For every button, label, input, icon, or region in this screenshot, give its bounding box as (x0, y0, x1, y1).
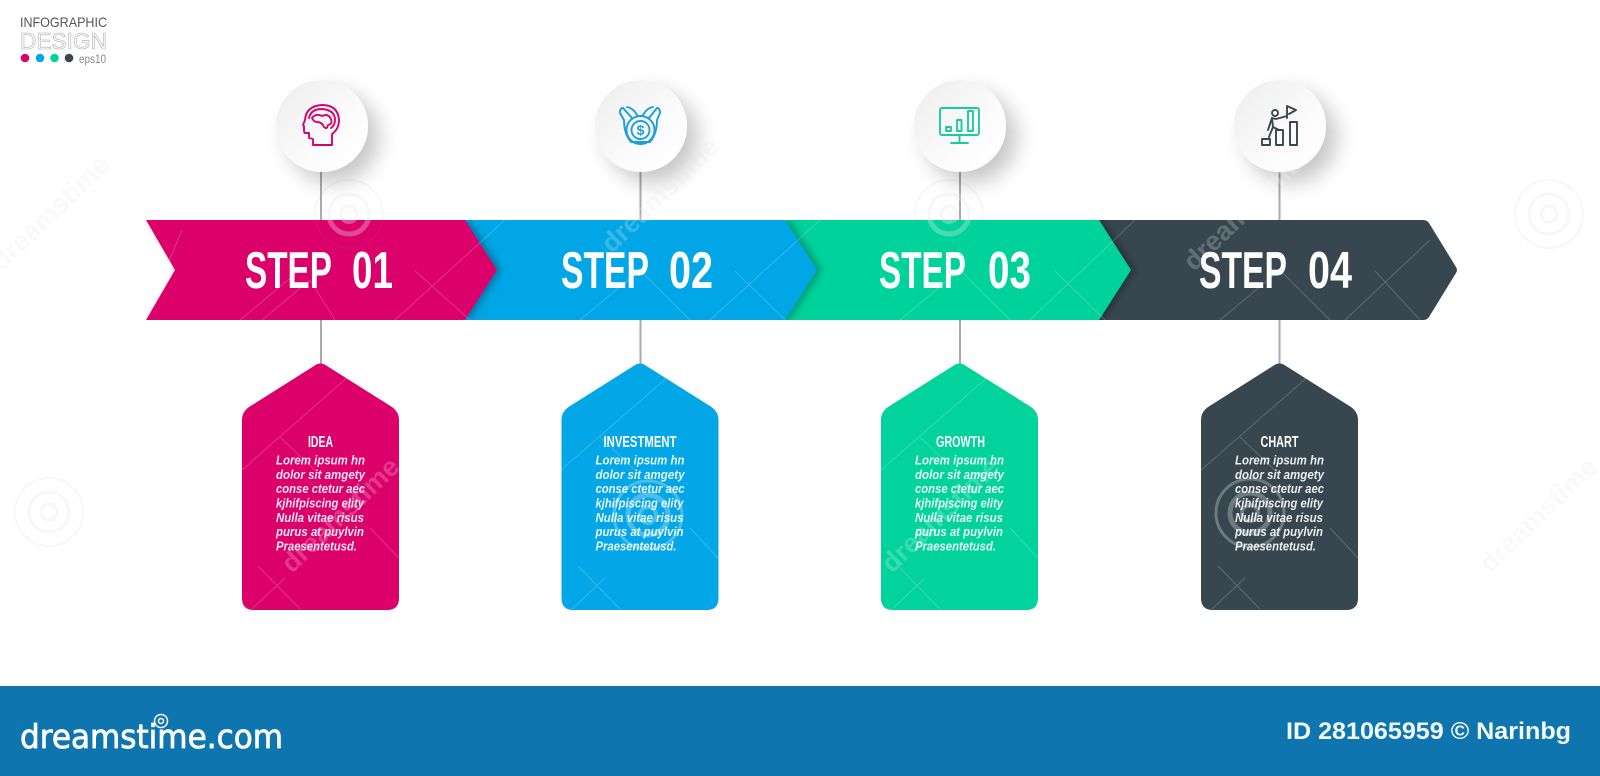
card body text: idea (275, 454, 366, 554)
card title: idea: IDEA (308, 434, 333, 451)
card title: investment: INVESTMENT (604, 434, 677, 451)
card body text: investment: kjhifpiscing elity (596, 496, 684, 510)
card body text: growth: kjhifpiscing elity (915, 496, 1004, 510)
card body text: investment: dolor sit amgety (596, 468, 685, 482)
label: step 04: STEP (1199, 242, 1287, 300)
label: step 04: 04 (1308, 242, 1352, 300)
card title: chart: CHART (1260, 434, 1299, 451)
card body text: chart: Lorem ipsum hn (1235, 454, 1324, 468)
arrow: step 01 (146, 220, 497, 320)
card body text: growth: Lorem ipsum hn (915, 454, 1004, 468)
footer brand: dreamstime.com (20, 717, 283, 756)
card body text: chart: kjhifpiscing elity (1235, 496, 1324, 510)
card body text: chart: purus at puylvin (1234, 525, 1323, 539)
logo colour dots (21, 54, 73, 62)
card body text: idea: purus at puylvin (275, 525, 364, 539)
card body text: idea: Lorem ipsum hn (276, 454, 365, 468)
watermark overlay: dreamstime (875, 451, 1005, 578)
icon: person climbing bars to flag (1262, 106, 1297, 145)
circle badge: investment (595, 80, 687, 172)
card: investment (562, 364, 718, 610)
arrow band (146, 220, 1457, 320)
step labels (245, 242, 1352, 300)
card body text: growth (914, 454, 1005, 554)
label: step 03: 03 (988, 242, 1031, 300)
card body text: chart: dolor sit amgety (1235, 468, 1325, 482)
card body text: investment: Praesentetusd. (596, 540, 676, 554)
arrow: step 04 (1090, 220, 1457, 320)
card body text: investment (595, 454, 685, 554)
arrow: step 02 (460, 220, 817, 320)
card body text: investment: conse ctetur aec (596, 482, 685, 496)
watermark overlay: dreamstime (1473, 451, 1600, 578)
card body text: growth: conse ctetur aec (915, 482, 1004, 496)
card body text: chart: conse ctetur aec (1235, 482, 1324, 496)
card body text: investment: Nulla vitae risus (596, 511, 684, 525)
card: growth (881, 364, 1038, 610)
logo: infographic design (20, 14, 107, 66)
brand spiral (154, 714, 168, 728)
card: chart (1201, 364, 1358, 610)
card body text: growth: Praesentetusd. (915, 540, 996, 554)
connector lines (321, 170, 1280, 365)
icon: head with brain (303, 105, 339, 145)
logo eps label: eps10 (79, 54, 106, 66)
card body text: investment: purus at puylvin (595, 525, 684, 539)
watermark overlay (0, 131, 1600, 609)
label: step 02: 02 (669, 242, 713, 300)
card title: growth: GROWTH (936, 434, 985, 451)
arrow: step 03 (780, 220, 1131, 320)
label: step 01: 01 (352, 242, 393, 300)
logo subheading: DESIGN (20, 28, 107, 54)
label: step 02: STEP (561, 242, 649, 300)
card: idea (242, 364, 399, 610)
card body text: chart (1234, 454, 1325, 554)
logo heading: INFOGRAPHIC (20, 14, 107, 30)
card body text: growth: dolor sit amgety (915, 468, 1005, 482)
card body text: idea: Nulla vitae risus (276, 511, 364, 525)
card body text: idea: conse ctetur aec (276, 482, 365, 496)
circle badge: growth (914, 80, 1006, 172)
watermark overlay: dreamstime (1177, 149, 1307, 276)
label: step 01: STEP (245, 242, 332, 300)
card body text: chart: Nulla vitae risus (1235, 511, 1323, 525)
card body text: chart: Praesentetusd. (1235, 540, 1316, 554)
icon: monitor with bar chart (940, 108, 979, 143)
circle badge: idea (276, 80, 368, 172)
icon: hands holding dollar coin: $ (637, 122, 645, 138)
card body text: idea: kjhifpiscing elity (276, 496, 365, 510)
watermark overlay: dreamstime (595, 131, 725, 258)
label: step 03: STEP (879, 242, 966, 300)
watermark overlay: dreamstime (275, 451, 405, 578)
circle badge: chart (1234, 80, 1326, 172)
watermark overlay: dreamstime (595, 131, 725, 258)
card body text: idea: Praesentetusd. (276, 540, 357, 554)
footer band (0, 686, 1600, 776)
footer id and author: ID 281065959 © Narinbg (1286, 718, 1571, 745)
card body text: investment: Lorem ipsum hn (596, 454, 685, 468)
card body text: growth: Nulla vitae risus (915, 511, 1003, 525)
card body text: growth: purus at puylvin (914, 525, 1003, 539)
card body text: idea: dolor sit amgety (276, 468, 366, 482)
